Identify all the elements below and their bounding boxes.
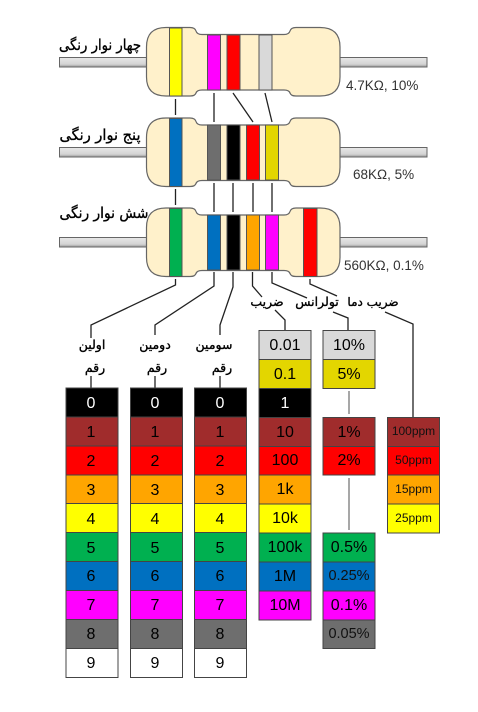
table: first digit <box>66 388 118 678</box>
multiplier values: 1k <box>277 481 294 498</box>
leader lines from six band resistor to columns <box>91 272 413 417</box>
connector lines between four and five band resistors <box>176 93 272 122</box>
label: six bands: شش نوار رنگی <box>60 204 148 222</box>
multiplier values: 100k <box>268 539 303 556</box>
value: 560KΩ, 0.1% <box>344 258 424 273</box>
digits: 9 <box>151 655 160 672</box>
wire leads <box>60 238 427 247</box>
label: first digit: اولین <box>79 337 105 353</box>
tolerance values: 1% <box>337 424 361 441</box>
ppm values <box>392 424 435 525</box>
table: tolerance <box>323 330 375 648</box>
colour bands <box>170 118 278 186</box>
tolerance values: 0.5% <box>331 539 367 556</box>
label: second digit: دومین <box>139 337 171 353</box>
digits: 3 <box>151 482 160 499</box>
resistor body <box>146 208 340 276</box>
digits: 6 <box>87 568 96 585</box>
digits: 3 <box>87 482 96 499</box>
colour bands <box>170 208 317 276</box>
tolerance values: 0.1% <box>331 597 367 614</box>
table: multiplier <box>259 330 311 620</box>
tolerance values: 0.25% <box>328 568 370 584</box>
multiplier values <box>268 337 303 614</box>
digits: 9 <box>87 655 96 672</box>
digits: 4 <box>151 511 160 528</box>
multiplier values: 1 <box>281 395 290 412</box>
digits: 4 <box>87 511 96 528</box>
digits: 3 <box>216 482 225 499</box>
value: 68KΩ, 5% <box>353 167 414 182</box>
label: third digit: سومین <box>196 337 232 353</box>
digits: 1 <box>216 424 225 441</box>
digits: 8 <box>151 626 160 643</box>
digits: 5 <box>151 540 160 557</box>
digits: 2 <box>151 453 160 470</box>
label: digit: رقم <box>85 360 105 376</box>
tolerance connector lines <box>348 391 350 530</box>
column labels <box>79 294 399 376</box>
label: five bands: پنج نوار رنگی <box>60 126 140 145</box>
digits: 7 <box>151 597 160 614</box>
label: four bands: چهار نوار رنگی <box>59 36 141 54</box>
tolerance values <box>328 337 370 642</box>
resistor body <box>146 28 340 96</box>
table: temperature coefficient <box>388 418 440 533</box>
wire leads <box>60 58 427 67</box>
label: digit: رقم <box>212 360 232 376</box>
digits: 4 <box>216 511 225 528</box>
resistor: four bands <box>59 28 427 96</box>
tolerance values: 0.05% <box>328 626 370 642</box>
ppm values: 100ppm <box>392 424 435 438</box>
tolerance values: 2% <box>337 452 361 469</box>
tolerance values: 10% <box>333 337 365 354</box>
digits: 0 <box>151 395 160 412</box>
label: temperature coefficient: ضریب دما <box>347 295 399 310</box>
digits: 5 <box>216 540 225 557</box>
digits <box>216 395 225 672</box>
multiplier values: 10k <box>272 510 299 527</box>
wire leads <box>60 148 427 157</box>
digits: 6 <box>216 568 225 585</box>
connector lines between five and six band resistors <box>176 183 272 212</box>
digits: 0 <box>87 395 96 412</box>
multiplier values: 10M <box>269 597 301 614</box>
label: multiplier: ضریب <box>250 294 284 310</box>
multiplier values: 10 <box>276 424 294 441</box>
ppm values: 50ppm <box>395 453 432 467</box>
table: second digit <box>130 388 182 678</box>
digits: 2 <box>216 453 225 470</box>
digits: 8 <box>87 626 96 643</box>
multiplier values: 0.01 <box>269 337 301 354</box>
ppm values: 25ppm <box>395 511 432 525</box>
resistor body <box>146 118 340 186</box>
multiplier values: 100 <box>272 452 298 469</box>
digits <box>87 395 96 672</box>
multiplier values: 1M <box>274 568 296 585</box>
label: tolerance: تولرانس <box>295 294 339 310</box>
resistor: five bands <box>60 118 427 186</box>
tolerance rows <box>323 330 375 648</box>
resistor: six bands <box>60 204 427 276</box>
digits: 9 <box>216 655 225 672</box>
digits: 8 <box>216 626 225 643</box>
digits: 6 <box>151 568 160 585</box>
ppm values: 15ppm <box>395 482 432 496</box>
tolerance values: 5% <box>337 366 361 383</box>
digits: 5 <box>87 540 96 557</box>
value: 4.7KΩ, 10% <box>346 78 418 93</box>
digits: 7 <box>87 597 96 614</box>
digits: 2 <box>87 453 96 470</box>
digits: 7 <box>216 597 225 614</box>
digits: 1 <box>151 424 160 441</box>
multiplier values: 0.1 <box>274 366 296 383</box>
table: third digit <box>194 388 246 678</box>
label: digit: رقم <box>147 360 167 376</box>
digits: 1 <box>87 424 96 441</box>
digits: 0 <box>216 395 225 412</box>
digits <box>151 395 160 672</box>
colour bands <box>170 28 272 96</box>
